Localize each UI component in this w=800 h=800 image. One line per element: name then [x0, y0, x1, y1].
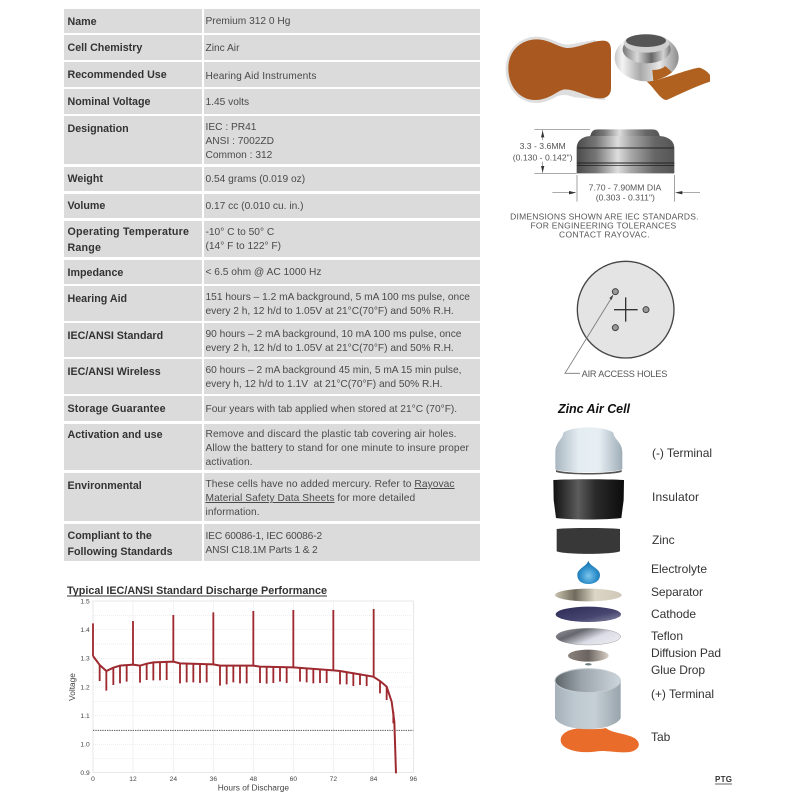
electrolyte drop	[577, 561, 600, 584]
row: hearing aid	[64, 286, 480, 321]
silver battery with peeling tab	[615, 34, 710, 100]
row: designation: ANSI : 7002ZD	[206, 136, 274, 147]
1.05V cutoff line	[93, 729, 413, 732]
height label: (0.130 - 0.142")	[513, 152, 573, 162]
row: IEC/ANSI wireless	[64, 359, 480, 394]
x axis title: Hours of Discharge	[218, 783, 289, 793]
row: activation and use: Remove and discard the plastic tab covering air holes.	[206, 429, 457, 440]
row: environmental: Environmental	[68, 480, 142, 492]
label: electrolyte: Electrolyte	[651, 562, 707, 576]
upward recovery spikes	[93, 609, 374, 677]
x axis tick labels: 36	[210, 776, 217, 783]
row: environmental	[64, 473, 480, 521]
row: environmental: Material Safety Data Sheets for more detailed	[206, 493, 415, 504]
row: IEC/ANSI wireless: 60 hours – 2 mA background 45 min, 5 mA 15 min pulse,	[206, 365, 461, 376]
row: recommended use	[64, 62, 480, 87]
x axis tick labels: 12	[129, 776, 137, 783]
dimensions note: CONTACT RAYOVAC.	[559, 230, 650, 240]
row: IEC/ANSI wireless: every h, 12 h/d to 1.1V at 21°C(70°F) and 50% R.H.	[206, 379, 442, 390]
row: weight: Weight	[68, 172, 103, 184]
row: operating temperature range: Range	[68, 242, 101, 254]
y axis tick labels: 1.3	[80, 656, 90, 663]
insulator	[553, 479, 624, 520]
tab	[561, 728, 639, 752]
dimension drawing	[510, 129, 700, 240]
y axis tick labels: 1.4	[80, 627, 90, 634]
label: diffusion pad: Diffusion Pad	[651, 646, 721, 660]
row: operating temperature range	[64, 221, 480, 257]
row: activation and use: Activation and use	[68, 429, 163, 441]
row: designation: Designation	[68, 123, 129, 135]
x axis tick labels: 60	[290, 776, 297, 783]
x axis tick labels: 72	[330, 776, 337, 783]
battery tab product photo	[506, 34, 710, 103]
row: volume: Volume	[68, 200, 105, 212]
dimensions note: FOR ENGINEERING TOLERANCES	[530, 221, 676, 231]
zinc air cell title: Zinc Air Cell	[557, 402, 631, 416]
row: impedance: < 6.5 ohm @ AC 1000 Hz	[206, 267, 321, 278]
negative terminal	[555, 427, 622, 475]
row: activation and use	[64, 424, 480, 470]
row: nominal voltage	[64, 89, 480, 114]
height label	[513, 141, 573, 162]
row: IEC/ANSI wireless: IEC/ANSI Wireless	[68, 366, 161, 378]
x axis tick labels: 0	[91, 776, 95, 783]
label: insulator: Insulator	[652, 490, 699, 504]
downward pulse spikes	[100, 662, 393, 723]
row: activation and use: Allow the battery to stand for one minute to insure proper	[206, 443, 469, 454]
row: volume	[64, 194, 480, 218]
label: tab: Tab	[651, 730, 671, 744]
teflon	[556, 628, 621, 645]
air access holes diagram: AIR ACCESS HOLES	[582, 369, 667, 379]
height label: 3.3 - 3.6MM	[520, 141, 566, 151]
row: name: Name	[68, 16, 97, 28]
label: zinc: Zinc	[652, 533, 675, 547]
x axis tick labels: 96	[410, 776, 417, 783]
discharge line chart	[67, 598, 417, 793]
x axis tick labels: 48	[250, 776, 257, 783]
diameter label: 7.70 - 7.90MM DIA	[589, 183, 662, 193]
row: storage guarantee: Four years with tab applied when stored at 21°C (70°F).	[206, 404, 457, 415]
row: operating temperature range: (14° F to 122° F)	[206, 241, 281, 252]
label: positive terminal: (+) Terminal	[651, 687, 714, 701]
label: glue drop: Glue Drop	[651, 663, 705, 677]
row: volume: 0.17 cc (0.010 cu. in.)	[206, 201, 303, 212]
y axis tick labels: 1.2	[80, 684, 90, 691]
label: cathode: Cathode	[651, 607, 696, 621]
row: IEC/ANSI standard: 90 hours – 2 mA background, 10 mA 100 ms pulse, once	[206, 329, 461, 340]
row: IEC/ANSI standard: every 2 h, 12 h/d to 1.05V at 21°C(70°F) and 50% R.H.	[206, 343, 454, 354]
diameter label: (0.303 - 0.311")	[596, 193, 655, 203]
row: compliant standards: Compliant to the	[68, 530, 152, 542]
part labels	[651, 446, 721, 744]
row: IEC/ANSI standard	[64, 323, 480, 357]
tab on battery back	[506, 37, 611, 103]
y axis tick labels: 1.5	[80, 598, 90, 605]
row: designation: IEC : PR41	[206, 122, 256, 133]
row: compliant standards: Following Standards	[68, 546, 173, 558]
zinc	[557, 528, 620, 554]
row: compliant standards: ANSI C18.1M Parts 1 & 2	[206, 545, 318, 556]
x axis tick labels: 24	[170, 776, 177, 783]
row: hearing aid: 151 hours – 1.2 mA background, 5 mA 100 ms pulse, once	[206, 292, 470, 303]
cathode	[556, 607, 621, 622]
diameter label	[589, 183, 662, 203]
exploded cell diagram	[553, 427, 639, 752]
row: impedance: Impedance	[68, 267, 123, 279]
air access holes diagram	[565, 261, 674, 379]
row: activation and use: activation.	[206, 457, 253, 468]
row: recommended use: Recommended Use	[68, 69, 167, 81]
row: operating temperature range: Operating Temperature	[68, 226, 189, 238]
row: environmental: These cells have no added mercury. Refer to Rayovac	[206, 479, 455, 490]
row: compliant standards	[64, 524, 480, 561]
chart title: Typical IEC/ANSI Standard Discharge Performance	[67, 585, 327, 597]
y axis title: Voltage	[67, 673, 77, 701]
row: name	[64, 9, 480, 33]
y axis tick labels	[80, 598, 90, 777]
diffusion pad	[568, 650, 609, 662]
row: hearing aid: Hearing Aid	[68, 293, 127, 305]
label: negative terminal: (-) Terminal	[652, 446, 712, 460]
row: nominal voltage: 1.45 volts	[206, 96, 249, 108]
row: environmental: information.	[206, 507, 260, 518]
row: recommended use: Hearing Aid Instruments	[206, 70, 317, 82]
y axis tick labels: 0.9	[80, 770, 90, 777]
row: nominal voltage: Nominal Voltage	[68, 96, 150, 108]
row: weight	[64, 167, 480, 191]
row: operating temperature range: -10° C to 50° C	[206, 227, 274, 238]
row: cell chemistry	[64, 35, 480, 60]
row: storage guarantee: Storage Guarantee	[68, 403, 166, 415]
row: storage guarantee	[64, 396, 480, 421]
row: designation	[64, 116, 480, 164]
row: impedance	[64, 260, 480, 284]
row: hearing aid: every 2 h, 12 h/d to 1.05V at 21°C(70°F) and 50% R.H.	[206, 306, 454, 317]
row: name: Premium 312 0 Hg	[206, 16, 290, 27]
voltage curve	[93, 656, 396, 773]
row: cell chemistry: Cell Chemistry	[68, 42, 142, 54]
label: separator: Separator	[651, 585, 703, 599]
row: designation: Common : 312	[206, 150, 272, 161]
glue drop	[585, 663, 592, 665]
y axis tick labels: 1.1	[80, 713, 90, 720]
row: IEC/ANSI standard: IEC/ANSI Standard	[68, 330, 163, 342]
positive terminal	[555, 669, 621, 729]
dimensions note	[510, 212, 698, 240]
separator	[555, 589, 622, 601]
specifications table	[64, 9, 480, 561]
x axis tick labels: 84	[370, 776, 378, 783]
dimension lines and arrows	[534, 130, 700, 202]
y axis tick labels: 1.0	[80, 742, 90, 749]
row: cell chemistry: Zinc Air	[206, 43, 239, 54]
dimensions note: DIMENSIONS SHOWN ARE IEC STANDARDS.	[510, 212, 698, 222]
row: weight: 0.54 grams (0.019 oz)	[206, 174, 305, 185]
cell side view	[577, 129, 674, 173]
PTG footer mark: PTG	[715, 775, 732, 784]
x axis tick labels	[91, 776, 417, 783]
row: compliant standards: IEC 60086-1, IEC 60086-2	[206, 531, 322, 542]
label: teflon: Teflon	[651, 629, 683, 643]
